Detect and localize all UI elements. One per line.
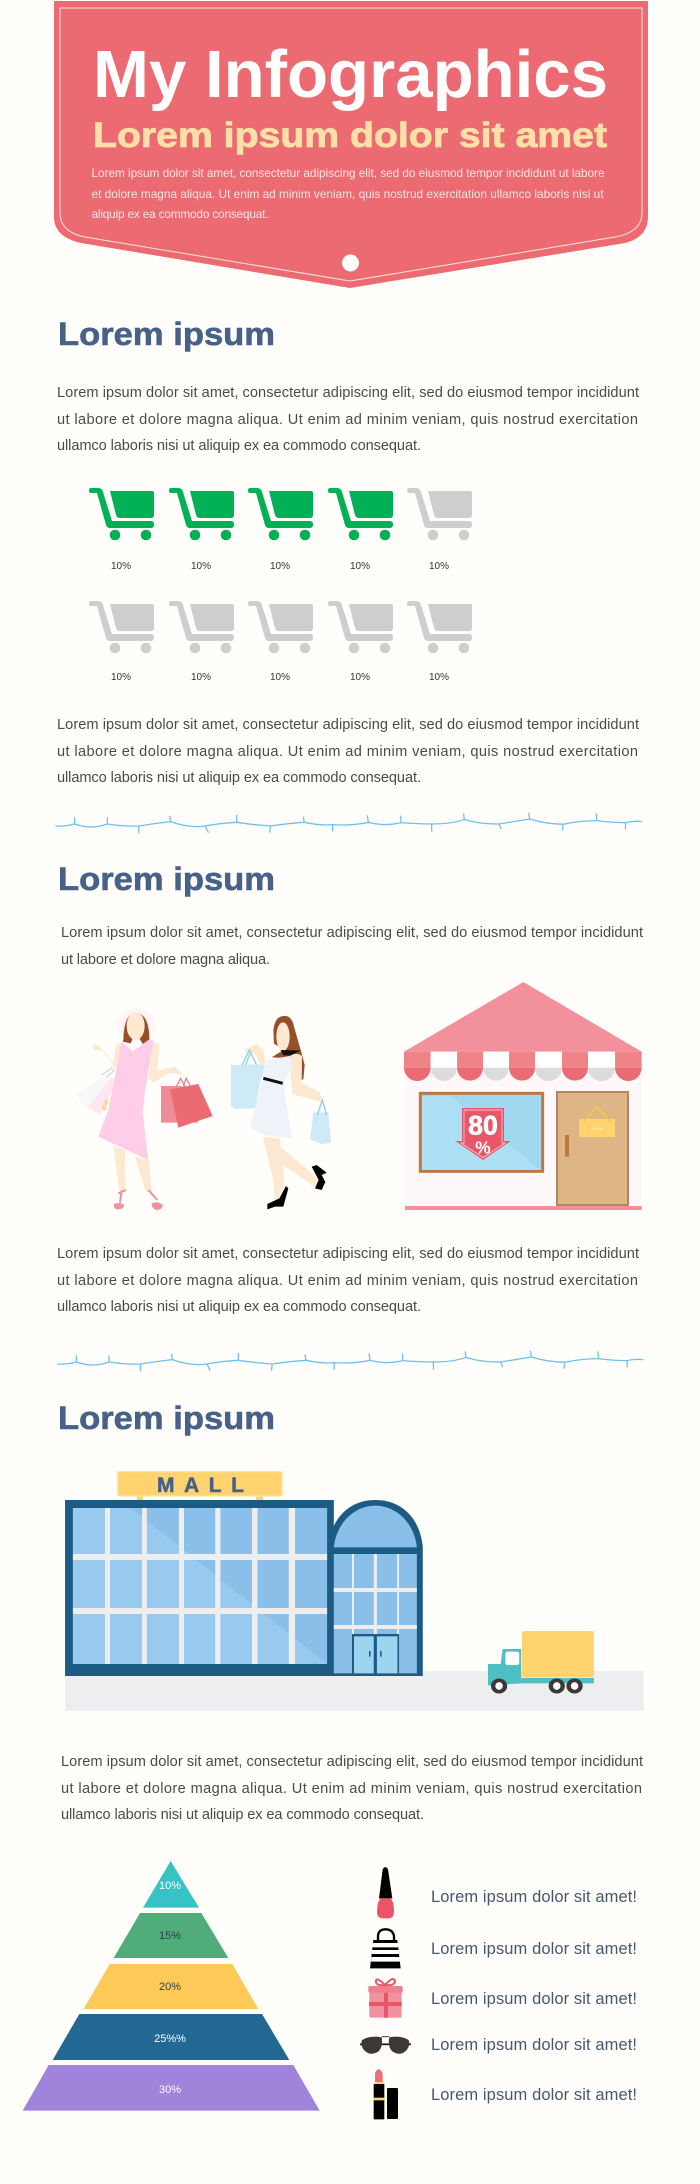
- legend text: Lorem ipsum dolor sit amet!: [431, 1990, 637, 2008]
- cart icon chart: [89, 488, 472, 683]
- section 3 paragraph: Lorem ipsum dolor sit amet, consectetur adipiscing elit, sed do eiusmod tempor incididunt: [61, 1754, 643, 1770]
- section 3 paragraph: [61, 1754, 643, 1823]
- pyramid labels: 20%: [159, 1981, 181, 1993]
- pyramid labels: 15%: [159, 1930, 181, 1942]
- pyramid tier 30%: [23, 2065, 320, 2111]
- header banner: [54, 1, 648, 288]
- cart 7: 10%: [191, 672, 211, 683]
- store door: OPEN: [591, 1127, 602, 1131]
- cart 2: [169, 488, 234, 572]
- section 3 heading: Lorem ipsum: [58, 1400, 275, 1436]
- section 2 second paragraph: [57, 1246, 639, 1315]
- title: My Infographics: [93, 37, 608, 112]
- icon: gift box: [368, 1979, 403, 2018]
- section 3 paragraph: ullamco laboris nisi ut aliquip ex ea commodo consequat.: [61, 1807, 424, 1823]
- cart 4: [328, 488, 393, 572]
- icon: sunglasses: [360, 2037, 411, 2054]
- icon: nail polish: [377, 1867, 394, 1918]
- section 2 second paragraph: ut labore et dolore magna aliqua. Ut enim ad minim veniam, quis nostrud exercitation: [57, 1273, 638, 1289]
- woman in white dress: [231, 1016, 331, 1209]
- legend text: Lorem ipsum dolor sit amet!: [431, 2086, 637, 2104]
- sale arrow badge: [455, 1108, 511, 1160]
- cart 6: 10%: [111, 672, 131, 683]
- woman in pink dress: [76, 1008, 213, 1210]
- sale arrow badge: 80: [468, 1110, 498, 1140]
- pyramid tier 10%: [143, 1861, 199, 1908]
- icon: striped bag: [370, 1929, 401, 1968]
- illustration: store: [404, 982, 642, 1210]
- illustration: mall and truck: [65, 1472, 644, 1711]
- section 1 second paragraph: ut labore et dolore magna aliqua. Ut enim ad minim veniam, quis nostrud exercitation: [57, 744, 638, 760]
- store window: [420, 1093, 543, 1171]
- cart 7: [169, 601, 234, 683]
- pyramid labels: 25%%: [154, 2033, 186, 2045]
- cart 10: [407, 601, 472, 683]
- store roof: [404, 982, 642, 1052]
- legend text: Lorem ipsum dolor sit amet!: [431, 2036, 637, 2054]
- section 1 second paragraph: ullamco laboris nisi ut aliquip ex ea commodo consequat.: [57, 770, 421, 786]
- cart 6: [89, 601, 154, 683]
- pyramid tier 15%: [114, 1913, 228, 1958]
- section 2 second paragraph: Lorem ipsum dolor sit amet, consectetur adipiscing elit, sed do eiusmod tempor incididunt: [57, 1246, 639, 1262]
- legend text: Lorem ipsum dolor sit amet!: [431, 1940, 637, 1958]
- section 2 heading: Lorem ipsum: [58, 861, 275, 897]
- section 1 paragraph: ullamco laboris nisi ut aliquip ex ea commodo consequat.: [57, 438, 421, 454]
- cart 2: 10%: [191, 561, 211, 572]
- header text block: et dolore magna aliqua. Ut enim ad minim veniam, quis nostrud exercitation ullamco laboris nisi ut: [92, 187, 604, 201]
- pyramid labels: 10%: [159, 1880, 181, 1892]
- cart 10: 10%: [429, 672, 449, 683]
- cart 8: [248, 601, 313, 683]
- mall sign board: [118, 1472, 282, 1501]
- pyramid chart: [23, 1861, 320, 2111]
- section 1 paragraph: [57, 385, 639, 454]
- section 2 paragraph: Lorem ipsum dolor sit amet, consectetur adipiscing elit, sed do eiusmod tempor incididunt: [61, 925, 643, 941]
- cart 8: 10%: [270, 672, 290, 683]
- section 2 paragraph: [61, 925, 643, 968]
- legend text: Lorem ipsum dolor sit amet!: [431, 1888, 637, 1906]
- header text block: aliquip ex ea commodo consequat.: [92, 207, 268, 221]
- cart 5: [407, 488, 472, 572]
- cart 3: [248, 488, 313, 572]
- pyramid labels: 30%: [159, 2084, 181, 2096]
- main mall building: [65, 1500, 334, 1676]
- legend list: [360, 1867, 637, 2119]
- cart 9: 10%: [350, 672, 370, 683]
- illustration: shopping women: [76, 1008, 331, 1210]
- cart 9: [328, 601, 393, 683]
- section 1 paragraph: ut labore et dolore magna aliqua. Ut enim ad minim veniam, quis nostrud exercitation: [57, 412, 638, 428]
- section 2 second paragraph: ullamco laboris nisi ut aliquip ex ea commodo consequat.: [57, 1299, 421, 1315]
- section 1 heading: Lorem ipsum: [58, 316, 275, 352]
- icon: lipstick: [373, 2069, 398, 2119]
- store awning: [404, 1052, 642, 1081]
- mall sign text: MALL: [157, 1474, 244, 1497]
- subtitle: Lorem ipsum dolor sit amet: [93, 116, 607, 155]
- cart 3: 10%: [270, 561, 290, 572]
- cart 5: 10%: [429, 561, 449, 572]
- pyramid tier 25%: [53, 2014, 289, 2060]
- delivery truck: [488, 1631, 594, 1692]
- cart 4: 10%: [350, 561, 370, 572]
- pyramid tier 20%: [84, 1964, 258, 2009]
- store door: [557, 1092, 628, 1205]
- legend text: [431, 1888, 637, 2104]
- cart 1: 10%: [111, 561, 131, 572]
- section 1 second paragraph: [57, 717, 639, 786]
- section 3 paragraph: ut labore et dolore magna aliqua. Ut enim ad minim veniam, quis nostrud exercitation: [61, 1781, 642, 1797]
- pyramid labels: [154, 1880, 186, 2096]
- section 1 second paragraph: Lorem ipsum dolor sit amet, consectetur adipiscing elit, sed do eiusmod tempor incididunt: [57, 717, 639, 733]
- sale arrow badge: %: [475, 1137, 491, 1157]
- cart 1: [89, 488, 154, 572]
- header text block: [92, 166, 605, 221]
- mall entrance tower: [328, 1500, 423, 1676]
- section 2 paragraph: ut labore et dolore magna aliqua.: [61, 952, 270, 968]
- section 1 paragraph: Lorem ipsum dolor sit amet, consectetur adipiscing elit, sed do eiusmod tempor incididunt: [57, 385, 639, 401]
- header text block: Lorem ipsum dolor sit amet, consectetur adipiscing elit, sed do eiusmod tempor incididunt ut labore: [92, 166, 605, 180]
